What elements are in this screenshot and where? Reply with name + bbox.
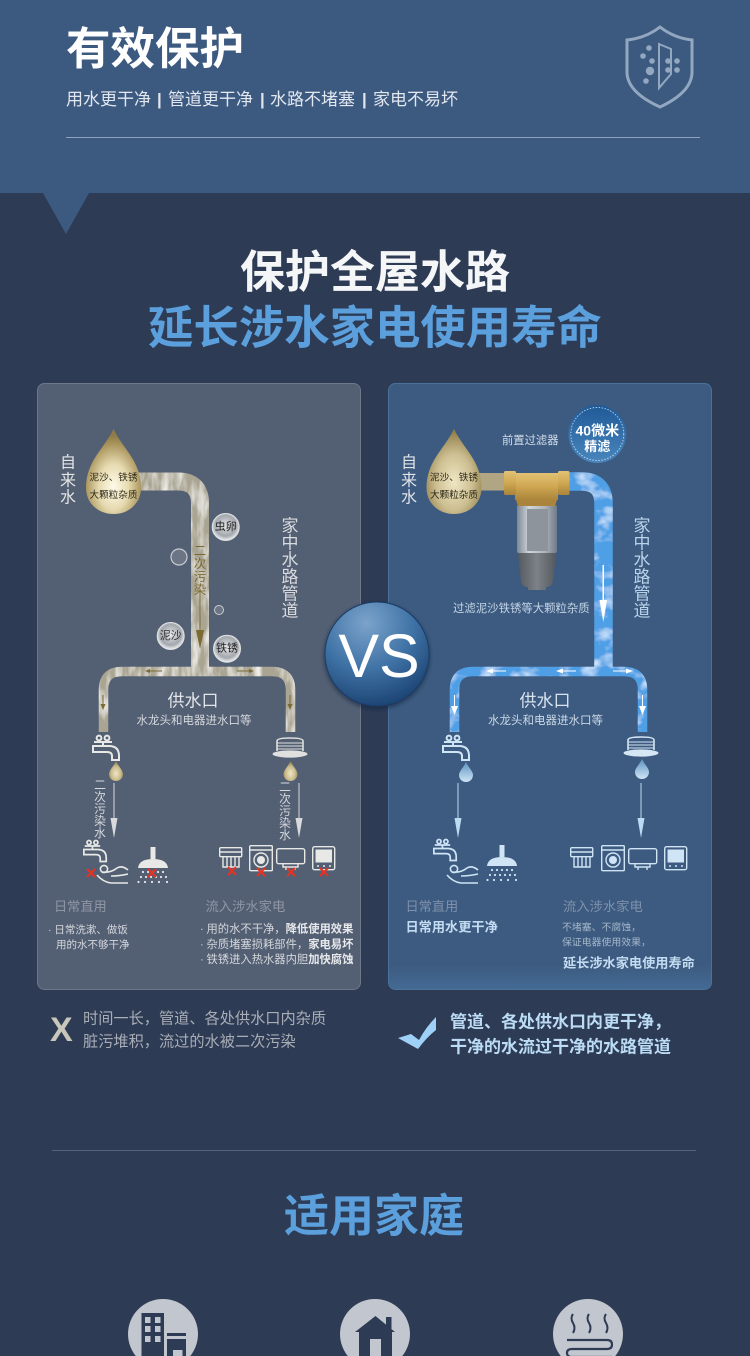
- icon: faucet: [443, 736, 469, 760]
- bubble: empty large: [171, 549, 187, 565]
- text: appliances: ·: [200, 954, 204, 966]
- icon: faucet: [93, 736, 119, 760]
- VS badge: VS: [338, 622, 420, 690]
- subtitle: |: [260, 90, 265, 108]
- icon: clean drop right: [635, 759, 649, 779]
- icon: dirty water drop: 大颗粒杂质: [430, 489, 478, 501]
- subtitle: 家电不易坏: [373, 90, 458, 108]
- callout: with filter: [398, 1012, 671, 1056]
- text: appliances: [562, 898, 695, 970]
- text: daily use: 日常直用: [54, 899, 107, 914]
- subtitle: |: [362, 90, 367, 108]
- VS badge: [325, 602, 429, 706]
- icon: dirty drop right: [284, 761, 298, 781]
- arrows: branch flow: [100, 669, 292, 710]
- bubble: silt: [157, 622, 184, 650]
- label: tap water: 自来水: [401, 454, 417, 506]
- text: appliances: 保证电器使用效果，: [562, 936, 651, 948]
- callout: without filter: X: [50, 1011, 73, 1049]
- icon: dirty water drop: 大颗粒杂质: [90, 489, 138, 501]
- pipe: tap water main: [104, 482, 290, 732]
- label: tap water: 自来水: [60, 454, 76, 506]
- label: outlets: 水龙头和电器进水口等: [488, 713, 603, 727]
- text: appliances: 延长涉水家电使用寿命: [563, 954, 695, 970]
- main heading: 延长涉水家电使用寿命: [148, 302, 602, 354]
- main heading: [148, 246, 602, 354]
- bubble: insect eggs: 虫卵: [215, 520, 237, 533]
- text: appliances: 铁锈进入热水器内胆: [206, 952, 308, 966]
- subtitle: 用水更干净: [66, 90, 151, 108]
- label: polluted water left: 二次污染水: [94, 778, 106, 840]
- text: appliances: 不堵塞、不腐蚀，: [562, 920, 641, 934]
- badge: 40 micron: 精滤: [584, 439, 610, 454]
- icon: dirty water drop: 泥沙、铁锈: [430, 472, 478, 484]
- text: daily use: 日常用水更干净: [406, 920, 498, 934]
- panel: without filter: [38, 384, 360, 990]
- icon: water heater: [277, 849, 305, 870]
- text: appliances: 用的水不干净，: [206, 922, 286, 936]
- callout: without filter: 脏污堆积，流过的水被二次污染: [83, 1034, 296, 1050]
- text: appliances: ·: [200, 924, 204, 936]
- label: polluted water right: 二次污染水: [279, 780, 291, 842]
- text: appliances: 降低使用效果: [286, 922, 354, 936]
- callout: with filter: 干净的水流过干净的水路管道: [450, 1036, 671, 1056]
- title: 有效保护: [66, 25, 244, 74]
- icon: hand: [447, 865, 478, 883]
- label: prefilter: 前置过滤器: [502, 433, 558, 447]
- label: home pipes: 家中水路管道: [282, 516, 298, 620]
- label: outlets: 供水口: [168, 692, 218, 710]
- icon: clean drop left: [459, 762, 473, 782]
- subtitle: 管道更干净: [168, 90, 253, 108]
- icon: shower: [486, 845, 517, 881]
- text: appliances: 杂质堵塞损耗部件，: [206, 937, 308, 951]
- text: appliances: [200, 898, 354, 966]
- icon: washing faucet: [84, 841, 106, 862]
- icon: washing machine: [250, 846, 272, 871]
- icon: inlet connector: [272, 738, 308, 758]
- label: outlets: [488, 692, 603, 727]
- bubble: empty small: [214, 606, 224, 614]
- label: outlets: 水龙头和电器进水口等: [136, 713, 252, 727]
- pipe: clean water: [454, 482, 642, 732]
- label: outlets: [136, 692, 252, 727]
- icon: panel appliance: [313, 847, 335, 870]
- text: appliances: 流入涉水家电: [206, 898, 285, 914]
- subtitle: 水路不堵塞: [270, 90, 355, 108]
- pipe: unfiltered inlet: [470, 473, 506, 490]
- icon: red crosses: [87, 867, 328, 877]
- label: filter effect: 过滤泥沙铁锈等大颗粒杂质: [453, 601, 590, 615]
- icon: water heater: [629, 849, 657, 870]
- callout: without filter: 时间一长，管道、各处供水口内杂质: [83, 1010, 326, 1028]
- icon: washing machine: [602, 846, 624, 871]
- icon: apartment building: [128, 1299, 198, 1356]
- text: appliances: 家电易坏: [308, 937, 354, 951]
- icon: dirty drop left: [109, 761, 123, 781]
- arrow: down left: [110, 783, 118, 838]
- subtitle: |: [157, 90, 162, 108]
- text: appliances: ·: [200, 939, 204, 951]
- label: outlets: 供水口: [520, 692, 570, 710]
- callout: without filter: [50, 1010, 326, 1050]
- label: secondary pollution: 二次污染: [194, 544, 207, 597]
- icon: shower: [137, 847, 168, 883]
- icon: hand: [97, 865, 128, 883]
- icon: dirty water drop: 泥沙、铁锈: [90, 472, 138, 484]
- bubble: insect eggs: [212, 514, 239, 540]
- badge: 40 micron: 40微米: [576, 422, 619, 438]
- arrows: branch flow: [451, 668, 646, 715]
- arrow: main flow: [600, 565, 607, 622]
- icon: shield: [627, 27, 692, 107]
- text: daily use: 用的水不够干净: [56, 938, 130, 951]
- icon: air conditioner: [220, 848, 242, 867]
- arrow: down right: [638, 783, 644, 838]
- icon: washing faucet: [434, 840, 456, 860]
- arrow: down right: [296, 783, 302, 838]
- text: appliances: 加快腐蚀: [308, 952, 353, 966]
- bubble: silt: 泥沙: [160, 629, 182, 642]
- icon: house: [340, 1299, 410, 1356]
- icon: air conditioner: [571, 848, 593, 867]
- text: daily use: [48, 899, 130, 951]
- icon: dirty water drop: [86, 429, 141, 514]
- text: daily use: 日常直用: [406, 899, 458, 914]
- bubble: rust: [214, 635, 240, 662]
- filter product: [504, 471, 570, 590]
- arrow: pipe flow: [196, 592, 204, 649]
- icon: dirty water drop: [426, 429, 482, 514]
- arrow: down left: [454, 783, 462, 838]
- header banner: [0, 0, 750, 234]
- text: appliances: 流入涉水家电: [563, 898, 643, 914]
- callout: with filter: 管道、各处供水口内更干净，: [450, 1012, 671, 1032]
- bubble: rust: 铁锈: [216, 642, 238, 655]
- label: home pipes: 家中水路管道: [634, 516, 650, 620]
- icon: floor heating: [553, 1299, 623, 1356]
- heading: applicable homes: 适用家庭: [284, 1190, 464, 1242]
- panel: with filter: [388, 384, 712, 990]
- icon: inlet connector: [624, 737, 658, 757]
- text: daily use: · 日常洗漱、做饭: [48, 923, 128, 936]
- text: daily use: [406, 899, 498, 934]
- badge: 40 micron: [568, 405, 626, 463]
- icon: panel appliance: [665, 847, 687, 870]
- main heading: 保护全屋水路: [240, 246, 510, 298]
